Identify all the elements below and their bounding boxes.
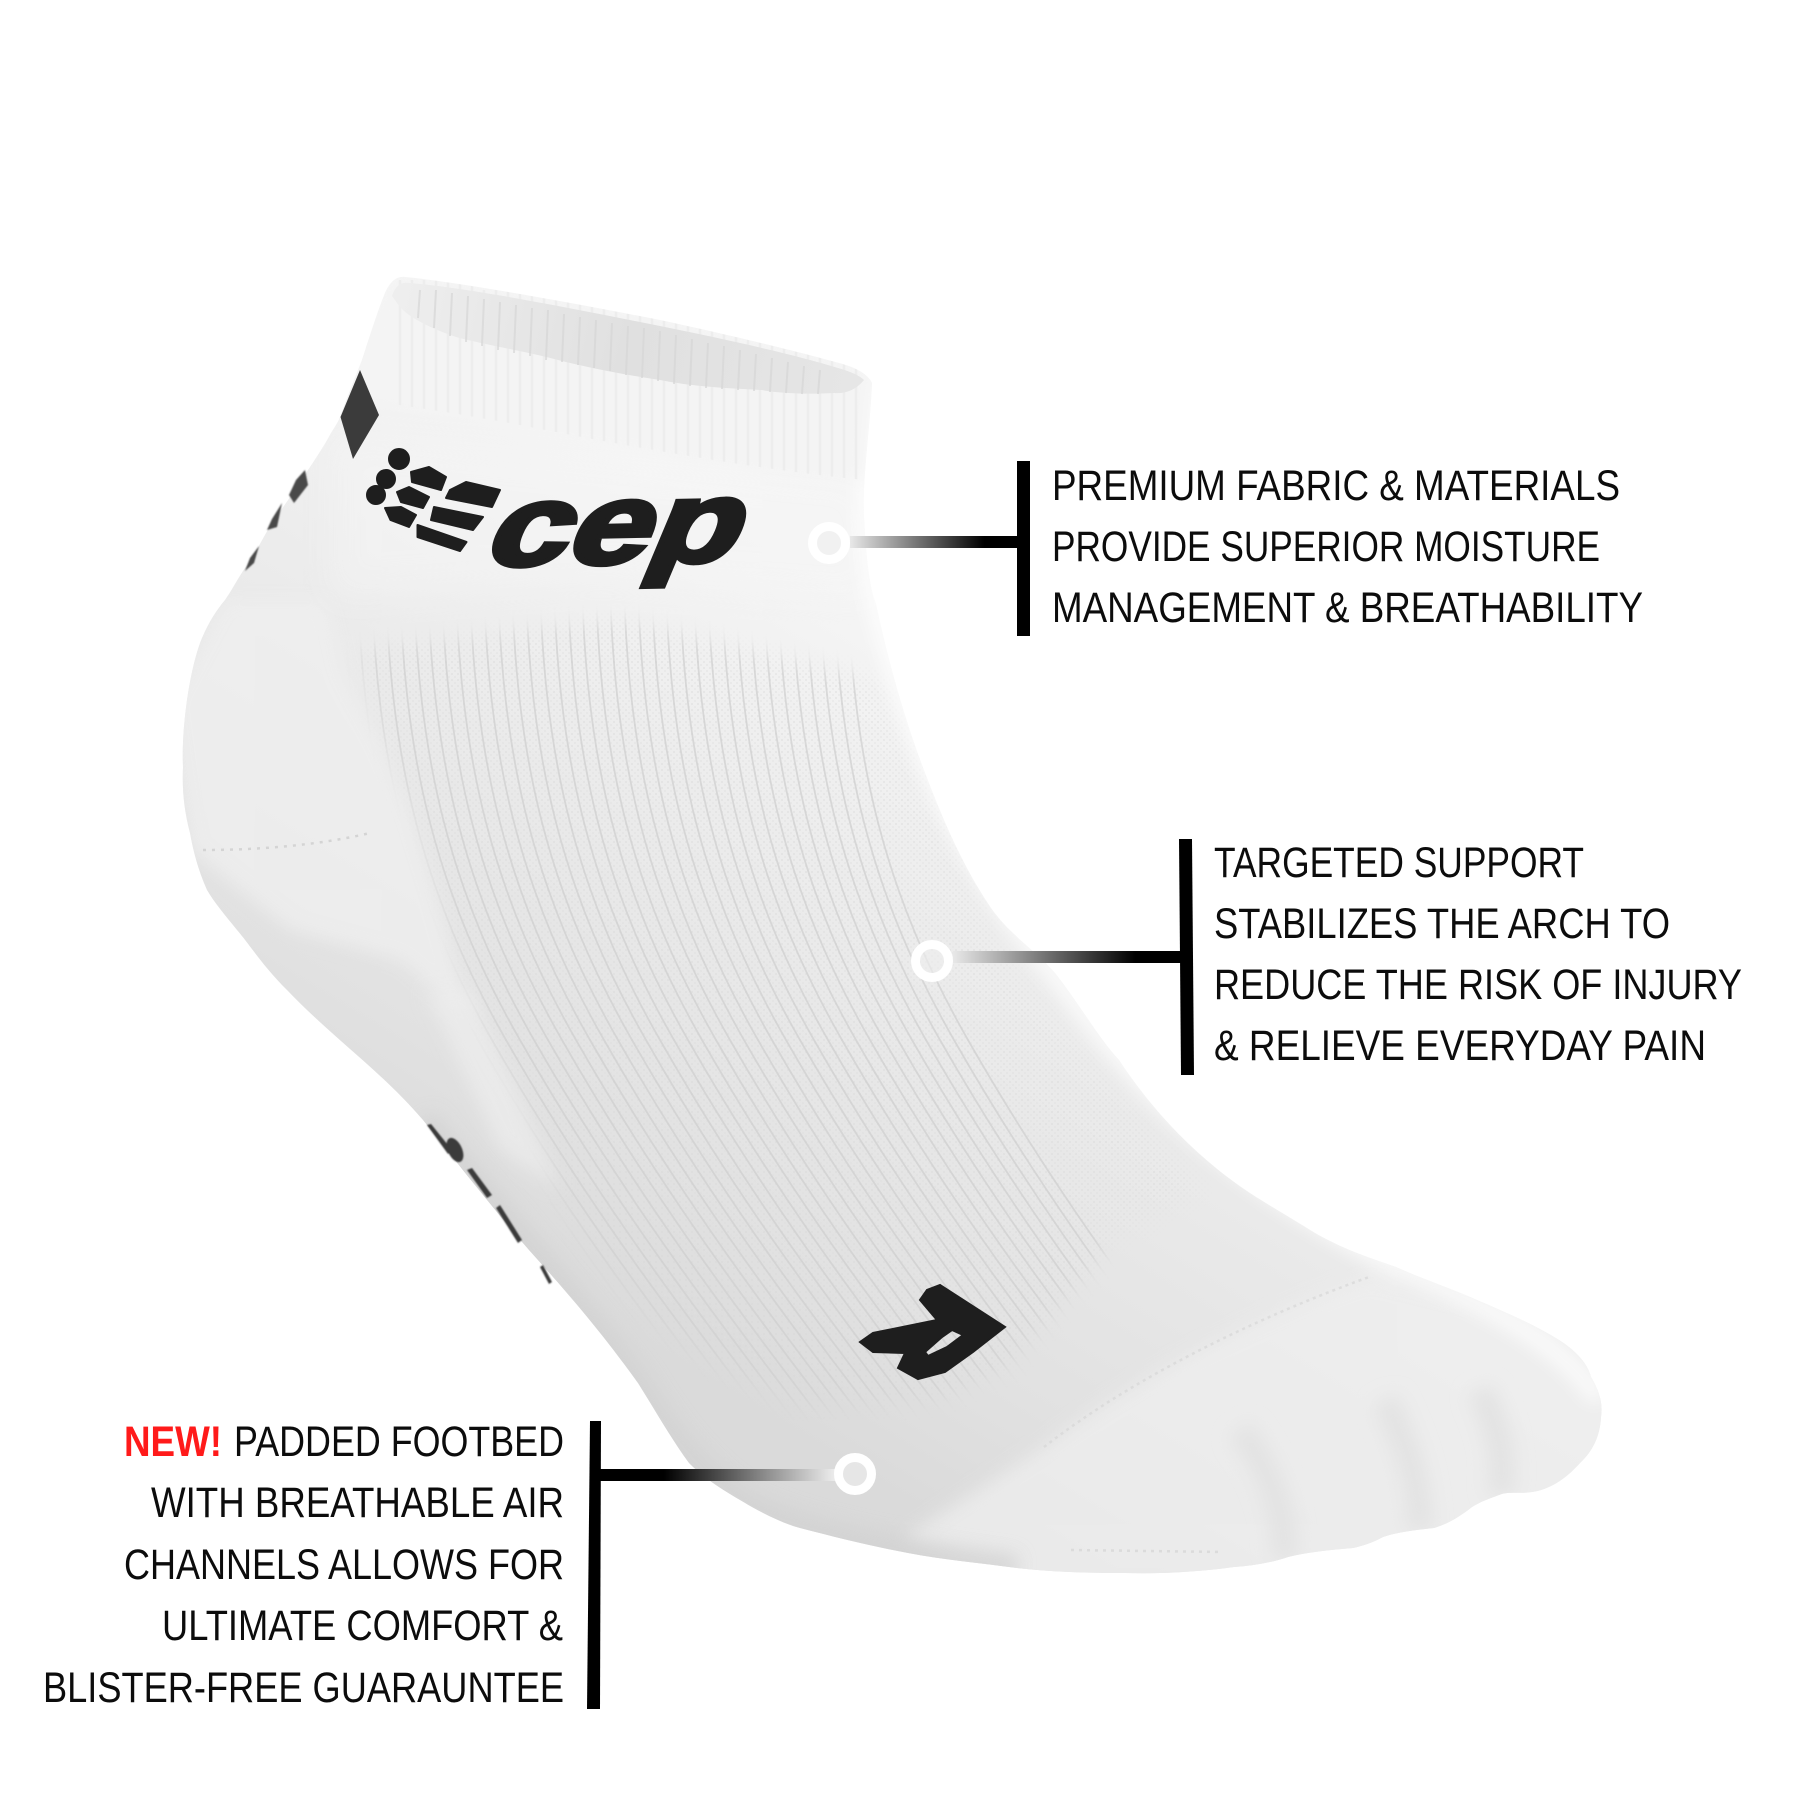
marker ring — [812, 526, 846, 560]
vertical bar — [1179, 839, 1194, 1075]
icon: cep logo grid — [367, 449, 500, 551]
text block: BLISTER-FREE GUARAUNTEE — [43, 1664, 564, 1712]
sock cuff — [520, 294, 857, 479]
text block: WITH BREATHABLE AIR — [151, 1479, 564, 1527]
side diamond mark — [340, 370, 379, 459]
side small marks — [245, 470, 308, 571]
text block: PADDED FOOTBED — [234, 1418, 564, 1466]
text block: ULTIMATE COMFORT & — [162, 1602, 563, 1650]
text block: MANAGEMENT & BREATHABILITY — [1052, 584, 1643, 632]
toe box — [918, 1374, 1400, 1573]
callout: premium fabric — [812, 461, 1643, 636]
text block — [43, 1418, 564, 1712]
text block: PROVIDE SUPERIOR MOISTURE — [1052, 523, 1600, 571]
right edge fade — [913, 745, 1594, 1392]
connector line — [600, 1469, 836, 1481]
illustration: white low-cut compression sock — [170, 277, 1620, 1590]
connector line — [953, 951, 1181, 963]
vertical bar — [1017, 461, 1030, 636]
callout: padded footbed — [43, 1418, 872, 1712]
cuff opening — [392, 283, 864, 394]
knit texture — [566, 637, 950, 878]
infographic canvas — [46, 277, 1742, 1709]
text block: CHANNELS ALLOWS FOR — [124, 1541, 564, 1589]
sole shadow — [458, 1163, 1018, 1568]
highlighted word: new: NEW! — [124, 1418, 222, 1466]
rib texture — [362, 618, 1104, 1396]
icon: toe mark — [860, 1285, 1005, 1379]
text block: PREMIUM FABRIC & MATERIALS — [1052, 462, 1620, 510]
sock body — [182, 382, 1602, 1574]
text block: & RELIEVE EVERYDAY PAIN — [1214, 1022, 1706, 1070]
text block: TARGETED SUPPORT — [1214, 839, 1584, 887]
marker ring — [916, 944, 948, 978]
vertical bar — [587, 1421, 601, 1709]
logo wordmark: cep — [470, 456, 776, 591]
seams — [203, 833, 1369, 1552]
marker ring — [838, 1458, 872, 1490]
text block — [1052, 462, 1643, 632]
callout: targeted support — [916, 839, 1742, 1075]
heel panel — [189, 721, 450, 981]
text block — [1214, 839, 1742, 1070]
text block: STABILIZES THE ARCH TO — [1214, 900, 1670, 948]
sole marks — [427, 1124, 552, 1284]
connector line — [850, 536, 1018, 548]
toe shading — [1390, 1399, 1506, 1514]
heel strip — [451, 1006, 542, 1167]
upper foot lightening — [330, 430, 880, 600]
